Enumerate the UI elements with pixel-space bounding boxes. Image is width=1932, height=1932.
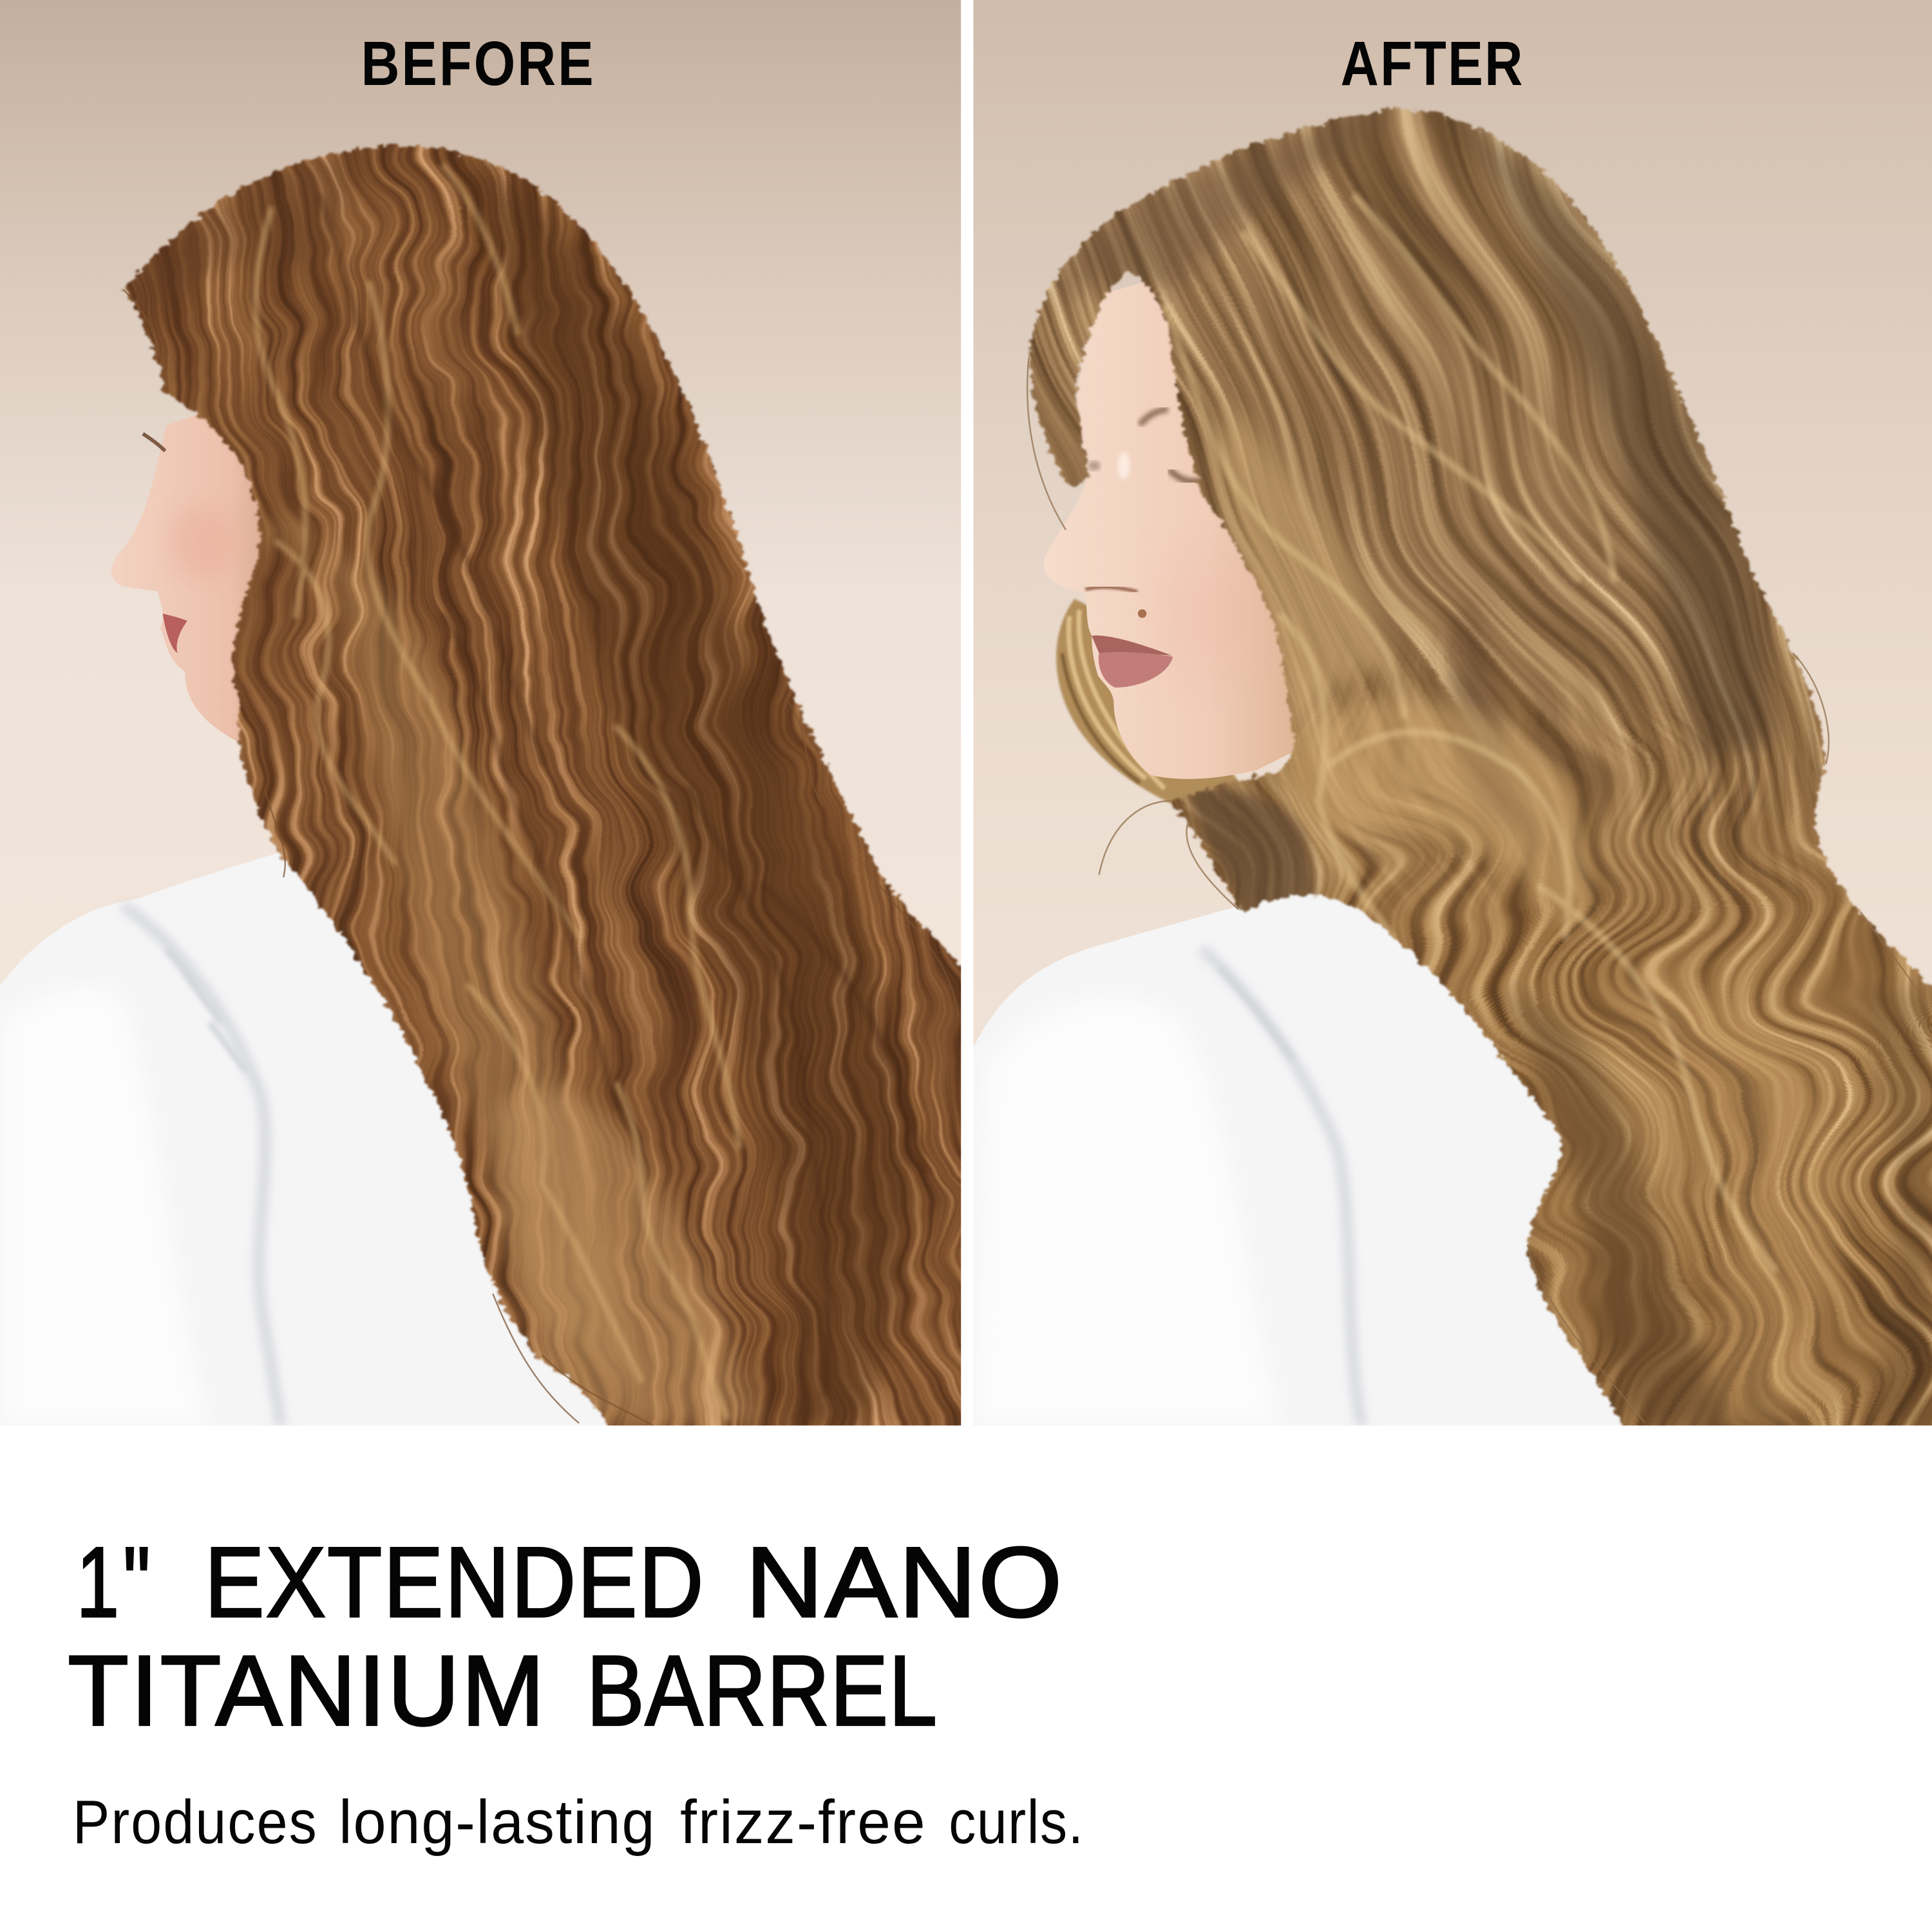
heading: TITANIUM <box>68 1635 545 1747</box>
heading: BARREL <box>587 1635 937 1747</box>
before: face and neck <box>111 415 263 742</box>
subheading <box>73 1788 1083 1857</box>
panel: before photo <box>0 0 961 1426</box>
after: shirt collar behind hair <box>1360 859 1419 936</box>
subheading: frizz-free <box>680 1788 925 1857</box>
panel divider <box>961 0 973 1426</box>
after: white shirt <box>973 862 1725 1426</box>
subheading: curls. <box>949 1788 1083 1857</box>
after: face and neck <box>1043 271 1318 779</box>
label: after: AFTER <box>1341 28 1522 99</box>
label: before: BEFORE <box>361 29 594 99</box>
heading: EXTENDED <box>205 1527 703 1638</box>
subheading: Produces <box>73 1788 317 1857</box>
heading: 1" <box>77 1527 151 1638</box>
before: hair <box>0 0 1296 1747</box>
after: hair lock behind jaw <box>1056 599 1244 803</box>
after: flyaway wisps <box>1027 357 1928 1423</box>
subheading: long-lasting <box>339 1788 655 1857</box>
heading <box>68 1527 1062 1747</box>
before: flyaway wisps <box>123 290 959 1426</box>
heading: NANO <box>746 1527 1062 1638</box>
before: white shirt <box>0 853 608 1426</box>
